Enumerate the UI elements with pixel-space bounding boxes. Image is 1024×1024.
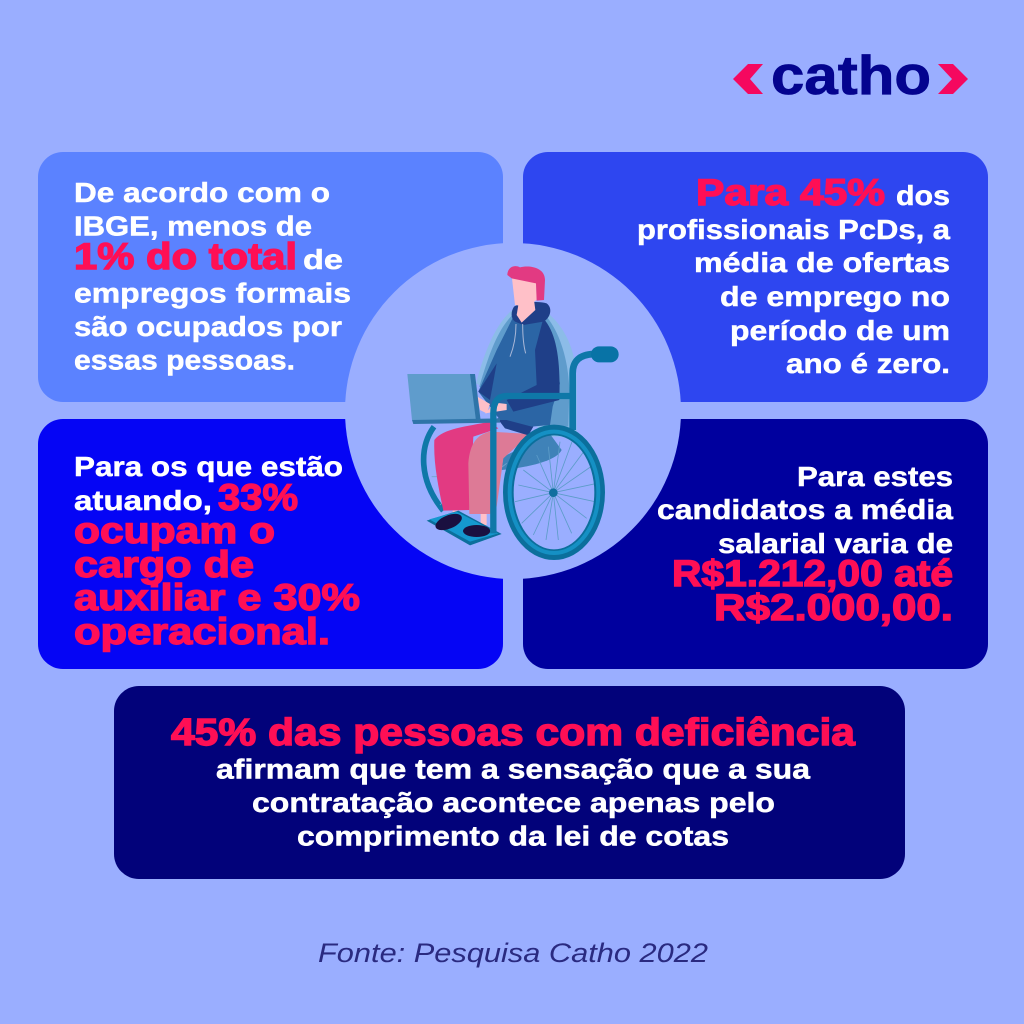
- icon: person in wheelchair with laptop: [407, 266, 619, 555]
- panel: bottom right: [523, 419, 988, 669]
- panel: bottom left: [38, 419, 503, 669]
- panel: bottom left: operacional.: [74, 611, 330, 652]
- panel: bottom right: salarial varia de: [718, 528, 953, 559]
- panel: top left: [38, 152, 503, 402]
- panel: top right: dos: [896, 180, 950, 211]
- panel: bottom banner: contratação acontece apenas pelo: [252, 787, 775, 818]
- panel: top left: de: [303, 244, 343, 275]
- panel: bottom right: candidatos a média: [657, 494, 953, 525]
- panel: top right: média de ofertas: [694, 247, 950, 278]
- panel: bottom left: Para os que estão: [74, 451, 343, 482]
- panel: bottom banner: afirmam que tem a sensação que a sua: [216, 754, 810, 784]
- panel: bottom banner: comprimento da lei de cotas: [297, 820, 729, 852]
- panel: top left: essas pessoas.: [74, 344, 295, 376]
- central circle: [345, 243, 681, 579]
- source note: Fonte: Pesquisa Catho 2022: [318, 938, 708, 968]
- panel: top left: De acordo com o: [74, 177, 330, 208]
- panel: bottom right: R$1.212,00 até: [672, 553, 953, 594]
- logo: catho: catho: [771, 44, 931, 106]
- panel: top right: período de um: [730, 315, 950, 346]
- panel: top right: de emprego no: [720, 281, 950, 312]
- panel: bottom banner: [114, 686, 905, 879]
- panel: bottom left: atuando,: [74, 485, 212, 516]
- panel: top left: são ocupados por: [74, 311, 342, 342]
- panel: bottom left: 33%: [218, 477, 298, 518]
- panel: top left: IBGE, menos de: [74, 210, 312, 242]
- panel: bottom right: Para estes: [797, 461, 953, 492]
- panel: bottom left: auxiliar e 30%: [74, 577, 360, 618]
- panel: bottom left: ocupam o: [74, 510, 275, 551]
- panel: top left: 1% do total: [74, 236, 297, 277]
- panel: top right: [523, 152, 988, 402]
- panel: top left: empregos formais: [74, 278, 351, 308]
- panel: top right: ano é zero.: [786, 348, 950, 379]
- panel: bottom right: R$2.000,00.: [714, 587, 953, 628]
- panel: top right: Para 45%: [696, 172, 885, 213]
- logo: catho: [733, 44, 968, 106]
- panel: bottom left: cargo de: [74, 544, 254, 585]
- panel: bottom banner: 45% das pessoas com deficiência: [171, 712, 856, 754]
- panel: top right: profissionais PcDs, a: [637, 214, 950, 245]
